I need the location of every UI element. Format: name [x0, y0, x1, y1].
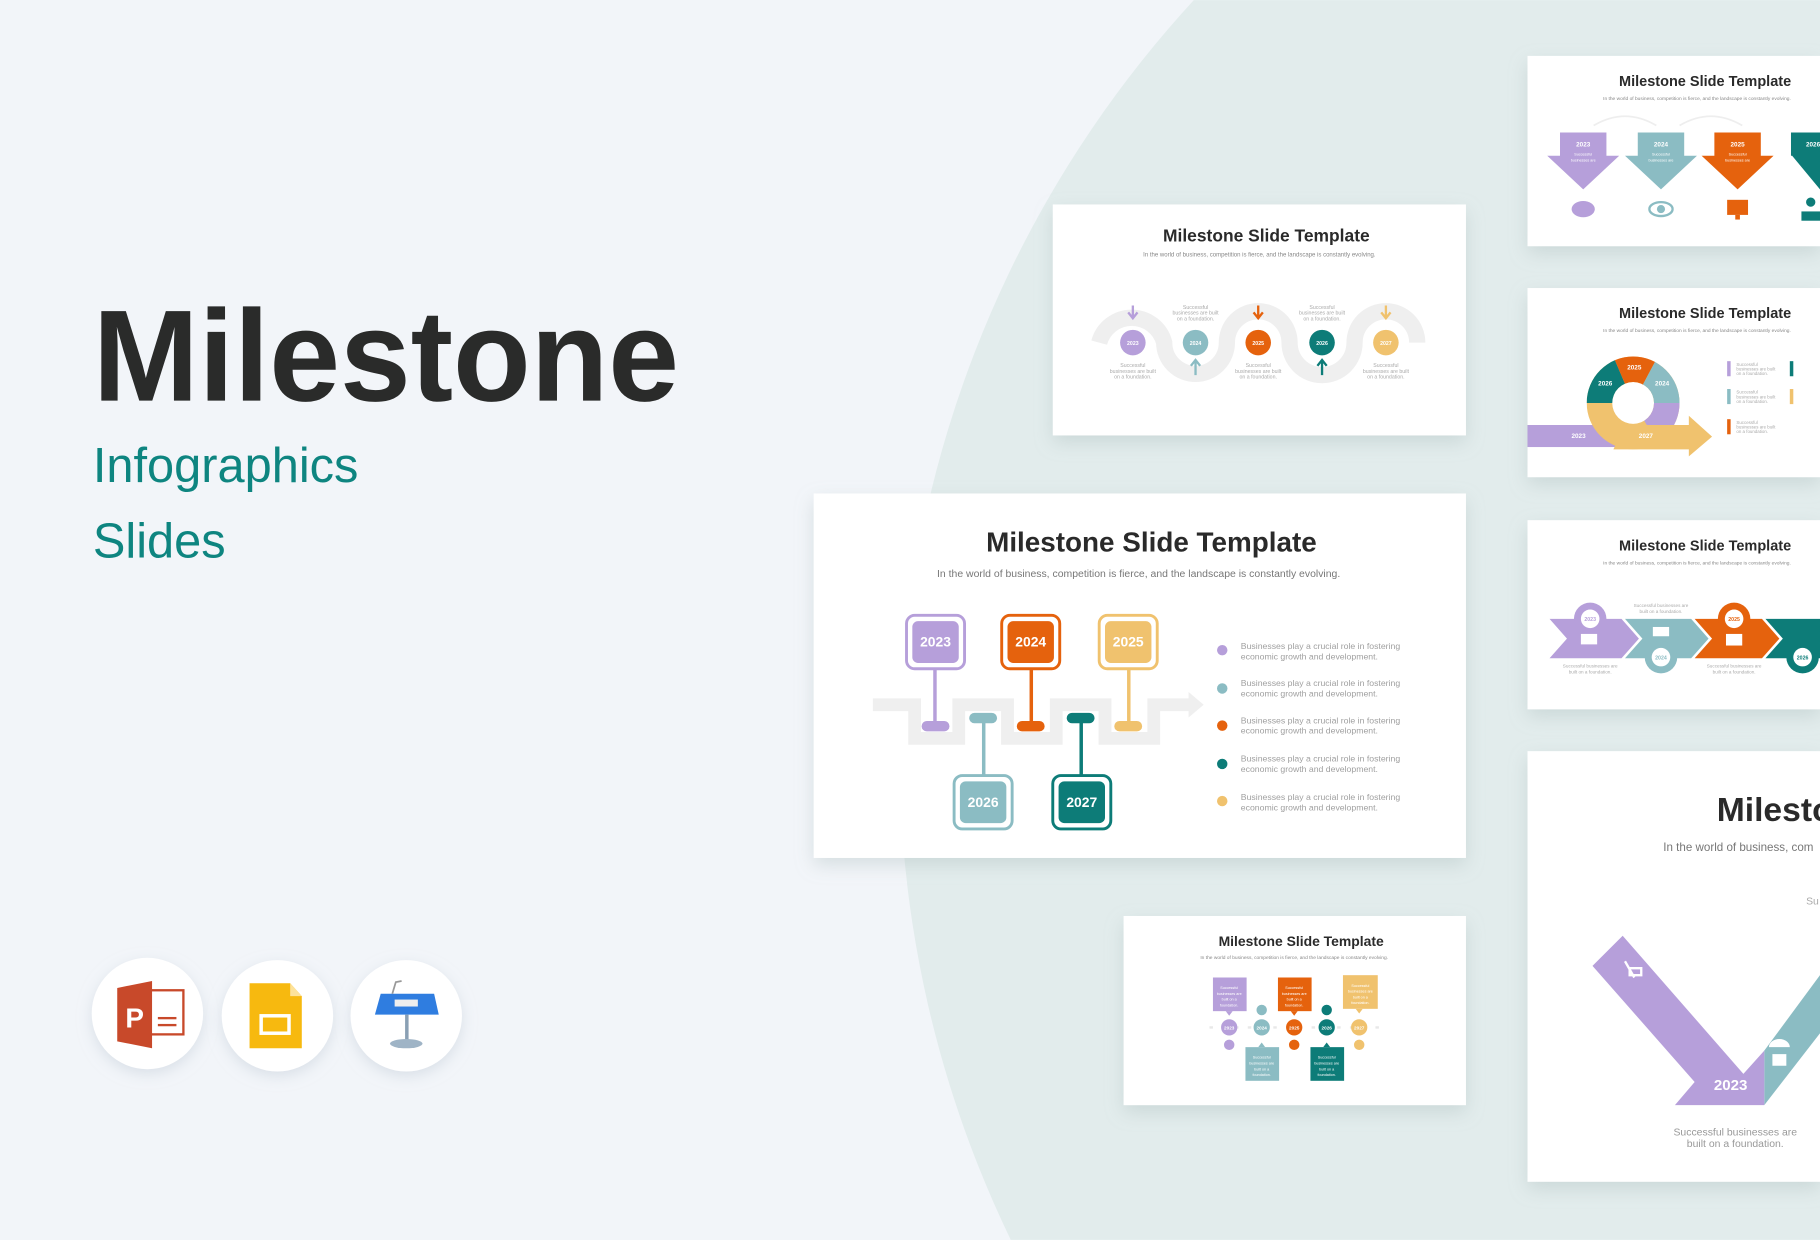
milestone markers: 2026 [968, 794, 999, 810]
slide: chevron milestones: built on a foundation. [1713, 669, 1756, 674]
slide: donut milestones: 2024 [1655, 381, 1670, 388]
main slide heading: Milestone Slide Template [986, 527, 1317, 558]
slide: donut milestones: 2026 [1598, 381, 1613, 388]
track [873, 692, 1204, 738]
slide: large partial (bottom right): built on a foundation. [1687, 1139, 1784, 1150]
slide: arrow milestones (top right): businesses are [1649, 159, 1673, 163]
slide: callout timeline: Successful [1351, 984, 1369, 988]
main slide heading: In the world of business, competition is fierce, and the landscape is constantly evolving. [937, 569, 1340, 580]
slide: callout timeline: built on a [1254, 1067, 1270, 1071]
slide: wave timeline: Successful [1120, 363, 1145, 369]
slide: donut milestones: Successful [1736, 362, 1758, 367]
slide: wave timeline: In the world of business, competition is fierce, and the landscape is constantly evolving. [1143, 253, 1376, 259]
slide: callout timeline: foundation. [1351, 1001, 1370, 1005]
slide: callout timeline: Milestone Slide Template [1219, 933, 1384, 949]
slide: wave timeline: 2023 [1127, 341, 1139, 347]
icon: PowerPoint: P [125, 1002, 144, 1033]
slide: arrow milestones (top right): Milestone Slide Template [1619, 74, 1791, 90]
slide: callout timeline: built on a [1222, 998, 1238, 1002]
slide: callout timeline: foundation. [1285, 1004, 1303, 1008]
slide: chevron milestones: built on a foundation. [1569, 669, 1612, 674]
slide: chevron milestones: 2023 [1584, 617, 1596, 623]
slide: arrow milestones (top right): 2025 [1730, 141, 1745, 148]
slide: callout timeline: Successful [1318, 1056, 1336, 1060]
bullet list: Businesses play a crucial role in fostering [1241, 754, 1400, 764]
slide: wave timeline: on a foundation. [1177, 317, 1214, 323]
slide: callout timeline: businesses are [1217, 992, 1242, 996]
bullet list [1217, 641, 1400, 812]
slide: arrow milestones (top right): 2026 [1806, 141, 1820, 148]
slide: wave timeline: on a foundation. [1114, 375, 1152, 381]
slide: donut milestones: 2023 [1571, 433, 1586, 440]
slide: callout timeline: Successful [1220, 986, 1238, 990]
slide: callout timeline: 2026 [1322, 1026, 1332, 1031]
slide: donut milestones: 2025 [1627, 364, 1642, 371]
slide: wave timeline: 2025 [1252, 341, 1264, 347]
slide: wave timeline: Successful [1309, 305, 1335, 311]
slide: wave timeline: Milestone Slide Template [1163, 226, 1370, 246]
slide: donut milestones: on a foundation. [1736, 399, 1768, 404]
slide: chevron milestones: Successful businesses are [1634, 603, 1689, 608]
slide: callout timeline [1124, 916, 1466, 1105]
slide: chevron milestones: In the world of business, competition is fierce, and the landscape is constantly evolving. [1603, 560, 1791, 566]
slide: main milestone [814, 493, 1466, 858]
main slide heading [937, 527, 1340, 580]
slide: chevron milestones: Successful businesses are [1563, 664, 1618, 669]
slide: wave timeline: businesses are built [1172, 311, 1219, 317]
title: Milestone [93, 283, 679, 429]
slide: chevron milestones: Successful businesses are [1707, 664, 1762, 669]
slide: chevron milestones [1528, 520, 1820, 709]
bullet list: economic growth and development. [1241, 764, 1378, 774]
slide: donut milestones: businesses are built [1736, 424, 1776, 429]
slide: callout timeline: built on a [1319, 1067, 1335, 1071]
slide: large partial (bottom right): Successful businesses are [1673, 1127, 1797, 1138]
slide: donut milestones: on a foundation. [1736, 371, 1768, 376]
slide: wave timeline: on a foundation. [1303, 317, 1341, 323]
slide: chevron milestones: built on a foundation. [1640, 609, 1682, 614]
slide: callout timeline: Successful [1253, 1056, 1271, 1060]
slide: arrow milestones (top right): businesses are [1571, 159, 1596, 163]
slide: chevron milestones: Milestone Slide Template [1619, 538, 1791, 554]
slide: callout timeline: businesses are [1282, 992, 1307, 996]
slide: arrow milestones (top right): Successful [1729, 153, 1747, 157]
slide: callout timeline: foundation. [1220, 1004, 1238, 1008]
slide: donut milestones: businesses are built [1736, 394, 1776, 399]
slide: callout timeline: 2024 [1257, 1026, 1267, 1031]
slide: arrow milestones (top right) [1528, 56, 1820, 246]
slide: wave timeline: businesses are built [1110, 369, 1156, 375]
slide: callout timeline: businesses are [1314, 1062, 1339, 1066]
slide: donut milestones [1528, 288, 1820, 477]
slide: callout timeline: built on a [1287, 998, 1303, 1002]
slide: wave timeline: Successful [1246, 363, 1271, 369]
slide: chevron milestones: 2026 [1797, 655, 1808, 661]
milestone markers [907, 615, 1157, 829]
subtitle: Slides: Slides [93, 514, 226, 568]
slide: callout timeline: Successful [1285, 986, 1303, 990]
slide: callout timeline: 2027 [1354, 1026, 1365, 1031]
slide: arrow milestones (top right): Successful [1652, 153, 1670, 157]
icon: Google Slides [222, 960, 333, 1072]
bullet list: economic growth and development. [1241, 651, 1378, 661]
milestone markers: 2023 [920, 634, 951, 650]
slide: callout timeline: In the world of business, competition is fierce, and the landscape is constantly evolving. [1200, 955, 1388, 961]
slide: large partial (bottom right): 2023 [1714, 1077, 1747, 1094]
icon: Keynote [351, 960, 462, 1072]
bullet list: Businesses play a crucial role in fostering [1241, 792, 1400, 802]
slide: callout timeline: 2023 [1224, 1026, 1235, 1031]
slide: callout timeline: foundation. [1253, 1073, 1271, 1077]
slide: callout timeline: 2025 [1289, 1026, 1300, 1031]
bullet list: economic growth and development. [1241, 726, 1378, 736]
slide: donut milestones: on a foundation. [1736, 429, 1768, 434]
subtitle: Infographics: Infographics [93, 439, 358, 493]
milestone markers: 2027 [1066, 794, 1098, 810]
slide: donut milestones: Successful [1736, 390, 1758, 395]
bullet list: Businesses play a crucial role in fostering [1241, 678, 1400, 688]
bullet list: economic growth and development. [1241, 689, 1378, 699]
slide: arrow milestones (top right): Successful [1574, 153, 1592, 157]
slide: wave timeline: on a foundation. [1239, 375, 1277, 381]
slide: wave timeline: Successful [1373, 363, 1399, 369]
slide: callout timeline: foundation. [1318, 1073, 1336, 1077]
slide: arrow milestones (top right): 2024 [1654, 141, 1669, 148]
slide: donut milestones: In the world of business, competition is fierce, and the landscape is constantly evolving. [1603, 328, 1791, 334]
slide: large partial (bottom right): Su [1806, 896, 1819, 907]
milestone markers: 2025 [1113, 634, 1144, 650]
slide: donut milestones: 2027 [1639, 433, 1653, 440]
slide: wave timeline: 2026 [1316, 341, 1328, 347]
slide: arrow milestones (top right): 2023 [1576, 141, 1591, 148]
slide: wave timeline: 2027 [1380, 341, 1392, 347]
milestone markers: 2024 [1015, 634, 1046, 650]
slide: donut milestones: businesses are built [1736, 366, 1776, 371]
slide: arrow milestones (top right): businesses are [1725, 159, 1750, 163]
icon: PowerPoint [92, 958, 203, 1069]
slide: callout timeline: businesses are [1348, 990, 1373, 994]
slide: chevron milestones: 2024 [1655, 655, 1667, 661]
slide: callout timeline: businesses are [1249, 1062, 1274, 1066]
slide: wave timeline: on a foundation. [1367, 375, 1405, 381]
slide: wave timeline [1053, 204, 1466, 435]
slide: wave timeline: businesses are built [1235, 369, 1282, 375]
bullet list: economic growth and development. [1241, 802, 1378, 812]
slide: wave timeline: Successful [1183, 305, 1208, 311]
slide: donut milestones: Milestone Slide Template [1619, 306, 1791, 322]
slide: chevron milestones: 2025 [1728, 617, 1740, 623]
slide: wave timeline: 2024 [1190, 341, 1201, 347]
slide: large partial (bottom right): In the world of business, com [1663, 841, 1813, 854]
slide: donut milestones: Successful [1736, 420, 1758, 425]
slide: callout timeline: built on a [1353, 995, 1369, 999]
slide: wave timeline: businesses are built [1363, 369, 1409, 375]
slide: large partial (bottom right) [1528, 751, 1820, 1182]
bullet list: Businesses play a crucial role in fostering [1241, 715, 1400, 725]
bullet list: Businesses play a crucial role in fostering [1241, 641, 1400, 651]
slide: wave timeline: businesses are built [1299, 311, 1346, 317]
slide: arrow milestones (top right): In the world of business, competition is fierce, and the landscape is constantly evolving. [1603, 96, 1791, 102]
